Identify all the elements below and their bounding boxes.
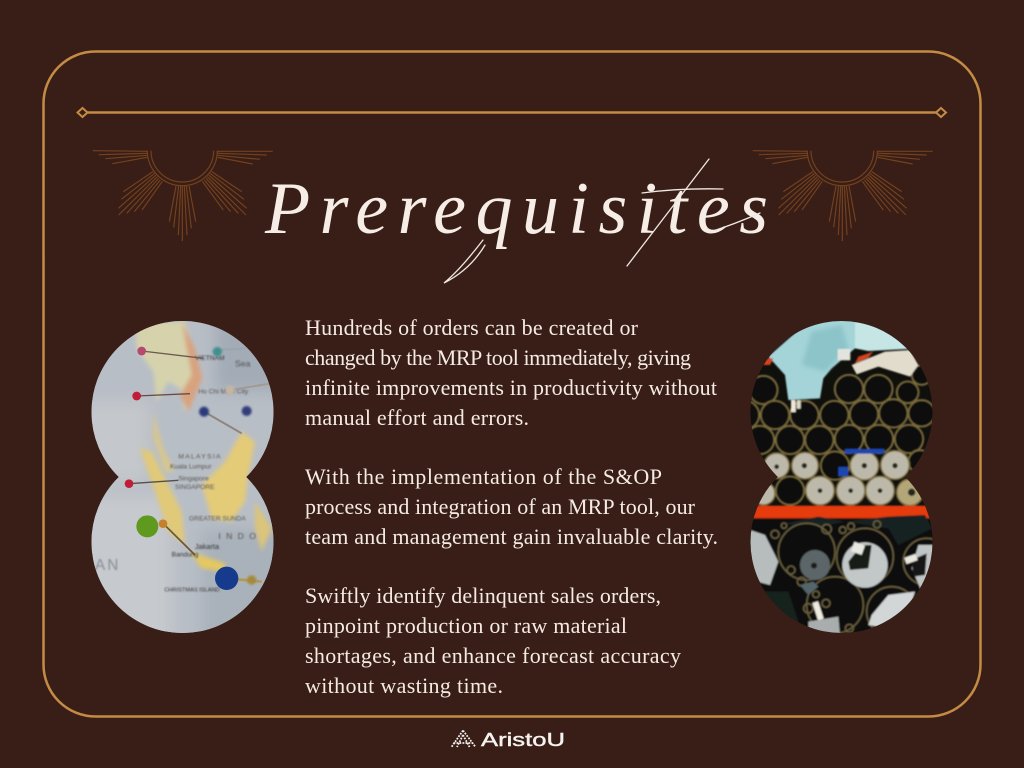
title flourishes bbox=[444, 159, 760, 283]
map labels: CHRISTMAS ISLAND bbox=[164, 588, 220, 594]
brand name: AristoU bbox=[481, 730, 565, 750]
icon: dotted triangle bbox=[452, 730, 476, 747]
body text: changed by the MRP tool immediately, giving bbox=[305, 345, 691, 370]
map labels: Ho Chi Minh City bbox=[198, 388, 249, 395]
body text: Hundreds of orders can be created or bbox=[305, 315, 639, 340]
top rule with diamond ends bbox=[78, 108, 946, 117]
body text: process and integration of an MRP tool, our bbox=[305, 494, 696, 519]
title: Prerequisites bbox=[264, 168, 768, 250]
title bbox=[264, 159, 768, 283]
map labels bbox=[95, 355, 261, 594]
map labels: GREATER SUNDA bbox=[189, 515, 246, 522]
map land bbox=[135, 322, 272, 572]
map labels: AN bbox=[95, 557, 120, 574]
icon: right sunburst bbox=[753, 151, 933, 241]
image: map with pins bbox=[92, 321, 274, 633]
map sea tones bbox=[92, 321, 274, 633]
body text: team and management gain invaluable clarity. bbox=[305, 524, 718, 549]
tubes bbox=[731, 365, 935, 505]
icon: left sunburst bbox=[93, 151, 273, 241]
body text: without wasting time. bbox=[305, 673, 503, 698]
body text bbox=[305, 315, 718, 698]
rolls bbox=[752, 451, 923, 506]
body text: infinite improvements in productivity without bbox=[305, 375, 717, 400]
body text: pinpoint production or raw material bbox=[305, 613, 627, 638]
body text: Swiftly identify delinquent sales orders, bbox=[305, 583, 661, 608]
body text: shortages, and enhance forecast accuracy bbox=[305, 643, 681, 668]
map labels: Singapore bbox=[178, 476, 209, 483]
map labels: MALAYSIA bbox=[178, 453, 222, 460]
map labels: Bandung bbox=[172, 552, 199, 559]
lower rack bbox=[751, 518, 932, 632]
map labels: SINGAPORE bbox=[175, 484, 215, 491]
pin needles bbox=[129, 347, 272, 582]
map labels: Sea bbox=[235, 359, 251, 369]
red shelf bbox=[745, 506, 940, 518]
map labels: VIETNAM bbox=[195, 355, 225, 362]
frame: rounded border bbox=[44, 52, 980, 716]
map labels: Kuala Lumpur bbox=[170, 463, 212, 470]
pin heads bbox=[125, 347, 256, 590]
plastic and cloth bbox=[768, 318, 855, 400]
body text: manual effort and errors. bbox=[305, 405, 529, 430]
body text: With the implementation of the S&OP bbox=[305, 464, 662, 489]
map labels: INDO bbox=[218, 531, 261, 541]
image: stacked fabric tubes bbox=[750, 321, 932, 633]
logo: AristoU bbox=[452, 730, 565, 750]
map labels: Jakarta bbox=[195, 542, 220, 551]
